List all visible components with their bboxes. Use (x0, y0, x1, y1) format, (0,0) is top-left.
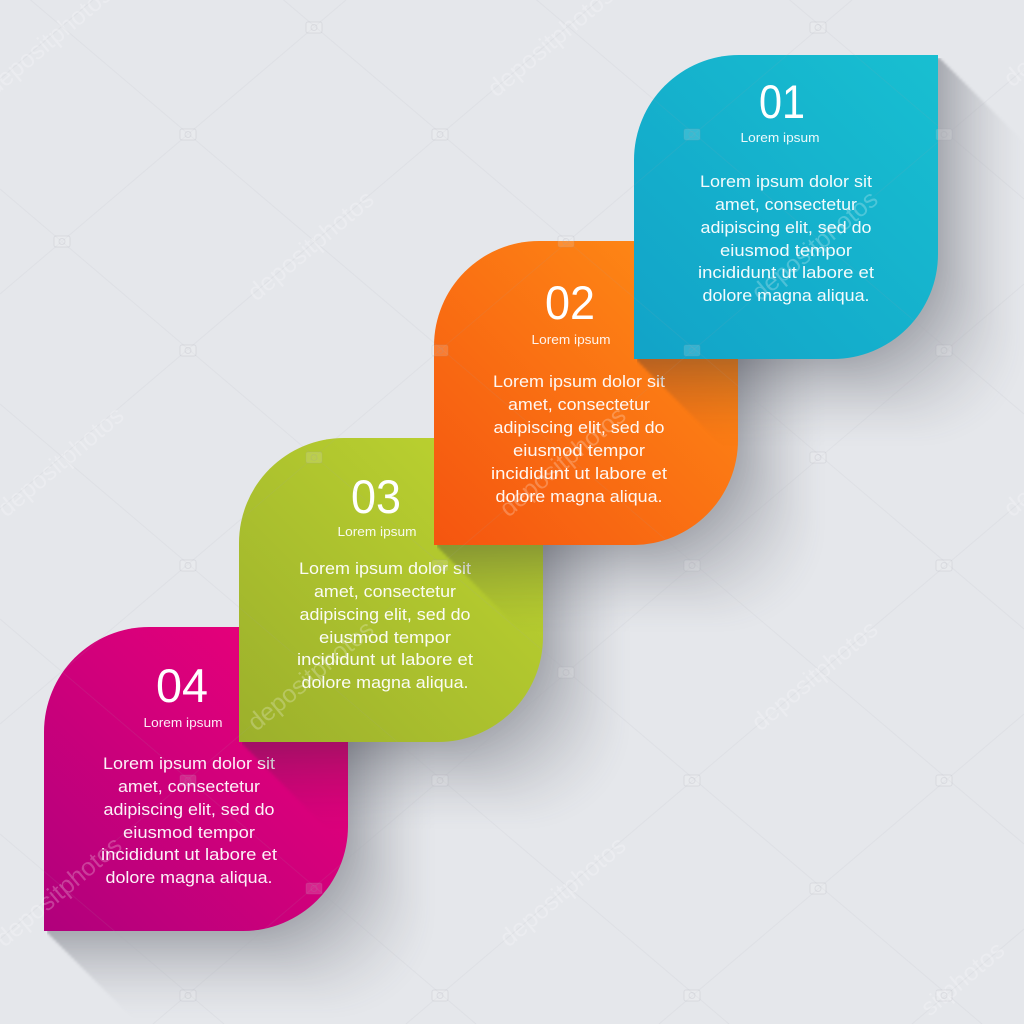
body text 04: amet, consectetur (118, 777, 260, 796)
panel: card 02 (434, 241, 738, 545)
subtitle 03: Lorem ipsum (338, 524, 416, 539)
body text 01 (698, 172, 874, 305)
card 04 shadow (47, 742, 412, 996)
watermark: depositphotos (242, 185, 379, 307)
body text 03: adipiscing elit, sed do (300, 605, 470, 624)
body text 04: eiusmod tempor (123, 823, 255, 842)
watermark: depositphotos (494, 401, 631, 523)
body text 04: incididunt ut labore et (101, 845, 277, 864)
body text 02: Lorem ipsum dolor sit (493, 372, 665, 391)
body text 01: adipiscing elit, sed do (700, 218, 872, 237)
subtitle 04: Lorem ipsum (144, 715, 222, 730)
panel: card 01 (634, 55, 938, 359)
body text 02: incididunt ut labore et (491, 464, 667, 483)
body text 01: eiusmod tempor (720, 241, 852, 260)
body text 03: eiusmod tempor (319, 628, 451, 647)
body text 02: eiusmod tempor (513, 441, 645, 460)
subtitle 02: Lorem ipsum (532, 332, 610, 347)
body text 04: adipiscing elit, sed do (104, 800, 274, 819)
card 01 shadow (637, 58, 1002, 424)
card 02 shadow (437, 359, 802, 610)
body text 04: Lorem ipsum dolor sit (103, 754, 275, 773)
watermark: depositphotos (494, 831, 631, 953)
number 04: 04 (156, 659, 208, 712)
number 01: 01 (759, 75, 805, 128)
body text 01: incididunt ut labore et (698, 263, 874, 282)
body text 03: amet, consectetur (314, 582, 456, 601)
panel: card 04 (44, 627, 348, 931)
subtitle 01: Lorem ipsum (740, 130, 820, 145)
body text 01: amet, consectetur (715, 195, 857, 214)
watermark: sitphotos (916, 936, 1010, 1022)
watermark: depositphotos (242, 615, 379, 737)
card 03 shadow (242, 545, 608, 806)
body text 02 (491, 372, 667, 506)
body text 02: amet, consectetur (508, 395, 650, 414)
body text 01: Lorem ipsum dolor sit (700, 172, 872, 191)
body text 01: dolore magna aliqua. (702, 286, 870, 305)
body text 02: adipiscing elit, sed do (494, 418, 664, 437)
body text 03: Lorem ipsum dolor sit (299, 559, 471, 578)
number 03: 03 (351, 470, 401, 523)
panel: card 03 (239, 438, 543, 742)
watermark: depositphotos (746, 185, 883, 307)
watermark: depositphotos (746, 615, 883, 737)
body text 02: dolore magna aliqua. (496, 487, 662, 506)
body text 03: incididunt ut labore et (297, 650, 473, 669)
body text 03: dolore magna aliqua. (302, 673, 468, 692)
body text 04 (101, 754, 277, 887)
number 02: 02 (545, 276, 595, 329)
body text 04: dolore magna aliqua. (106, 868, 272, 887)
body text 03 (297, 559, 473, 692)
